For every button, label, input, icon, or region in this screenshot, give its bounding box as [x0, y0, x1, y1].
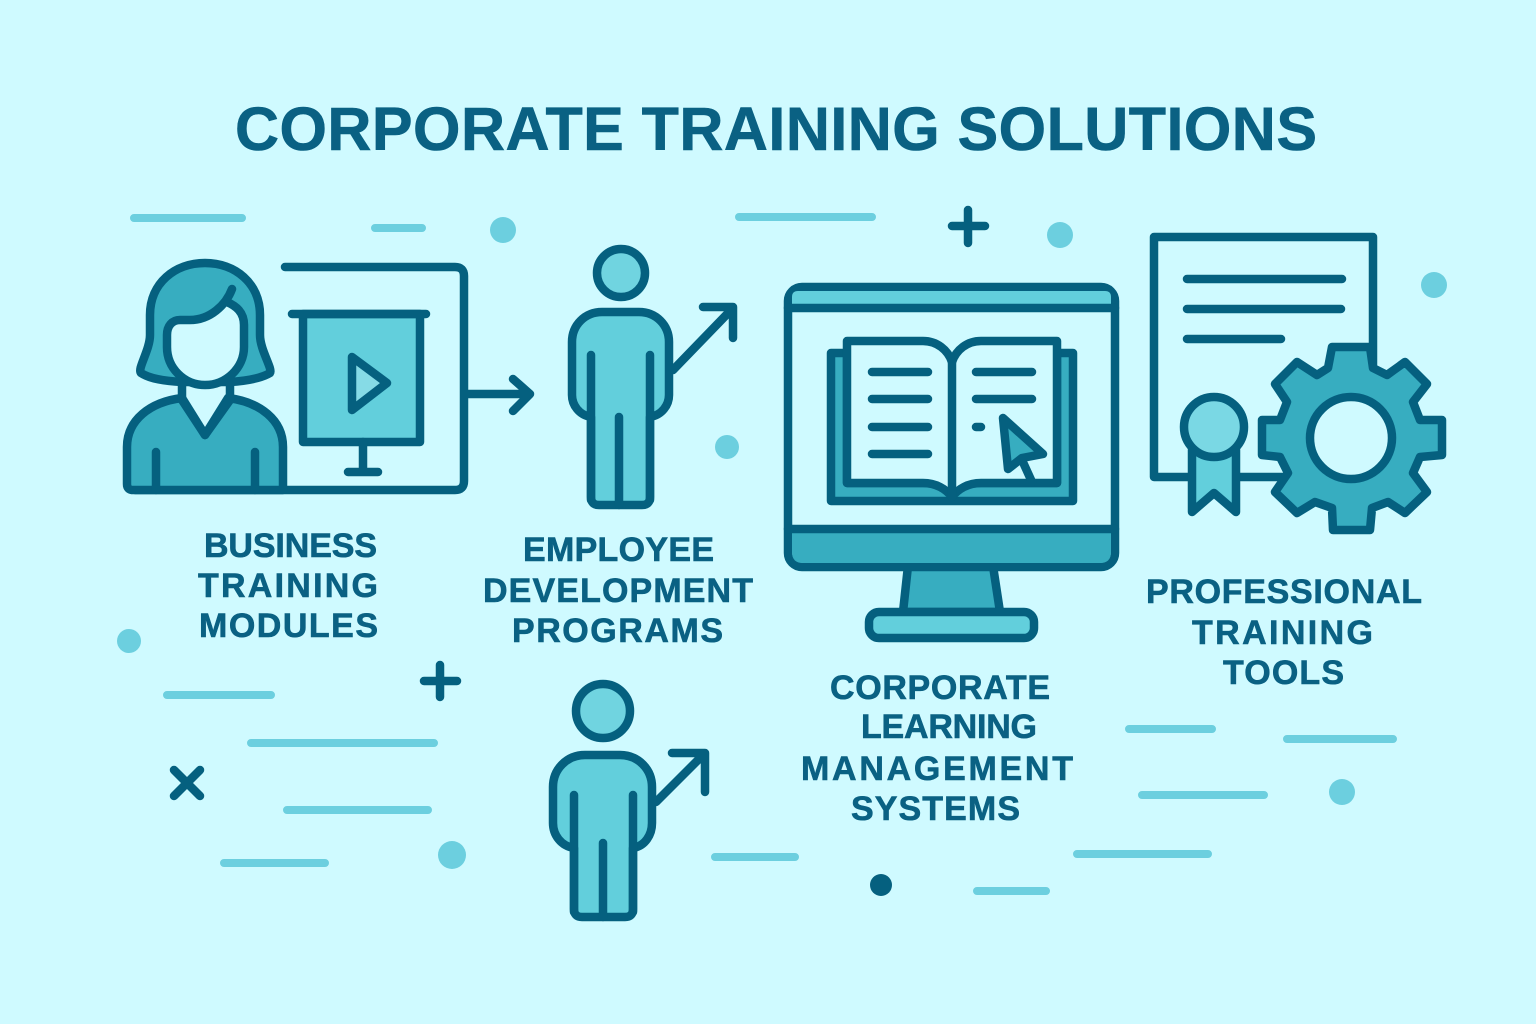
label: business training modules: TRAINING	[198, 567, 378, 605]
panel: employee figure with growth arrow	[572, 249, 733, 505]
decorative accents	[117, 210, 1447, 896]
icon: certificate	[1154, 237, 1373, 477]
panel: second employee figure with growth arrow	[553, 684, 705, 917]
label: employee development programs	[483, 531, 753, 650]
label: professional training tools	[1146, 573, 1422, 692]
panel: business training modules	[127, 263, 530, 490]
icon: open book	[831, 341, 1073, 501]
label: corporate learning management systems: SYSTEMS	[851, 790, 1020, 828]
label: employee development programs: PROGRAMS	[512, 612, 723, 650]
label: employee development programs: EMPLOYEE	[523, 531, 714, 569]
icon: ribbon seal	[1184, 397, 1244, 512]
label: corporate learning management systems: MANAGEMENT	[801, 750, 1073, 788]
label: professional training tools: TRAINING	[1192, 614, 1373, 652]
icon: frame and arrow	[135, 267, 530, 490]
label: business training modules: MODULES	[199, 607, 378, 645]
label: business training modules	[198, 527, 378, 645]
label: corporate learning management systems: CORPORATE	[830, 669, 1050, 707]
panel: learning management system monitor	[788, 287, 1115, 638]
icon: presentation screen with play button	[292, 314, 426, 472]
label: corporate learning management systems	[801, 669, 1073, 828]
title: CORPORATE TRAINING SOLUTIONS	[235, 95, 1317, 163]
icon: cursor	[1003, 418, 1043, 482]
icon: trainer	[127, 263, 283, 490]
label: business training modules: BUSINESS	[204, 527, 377, 565]
label: employee development programs: DEVELOPMENT	[483, 572, 753, 610]
panel: certificate and gear	[1154, 237, 1442, 530]
icon: gear	[1262, 347, 1442, 530]
icon: monitor stand	[869, 566, 1034, 638]
label: professional training tools: PROFESSIONAL	[1146, 573, 1422, 611]
label: corporate learning management systems: LEARNING	[861, 708, 1037, 746]
label: professional training tools: TOOLS	[1223, 654, 1344, 692]
icon: monitor body	[788, 287, 1115, 567]
